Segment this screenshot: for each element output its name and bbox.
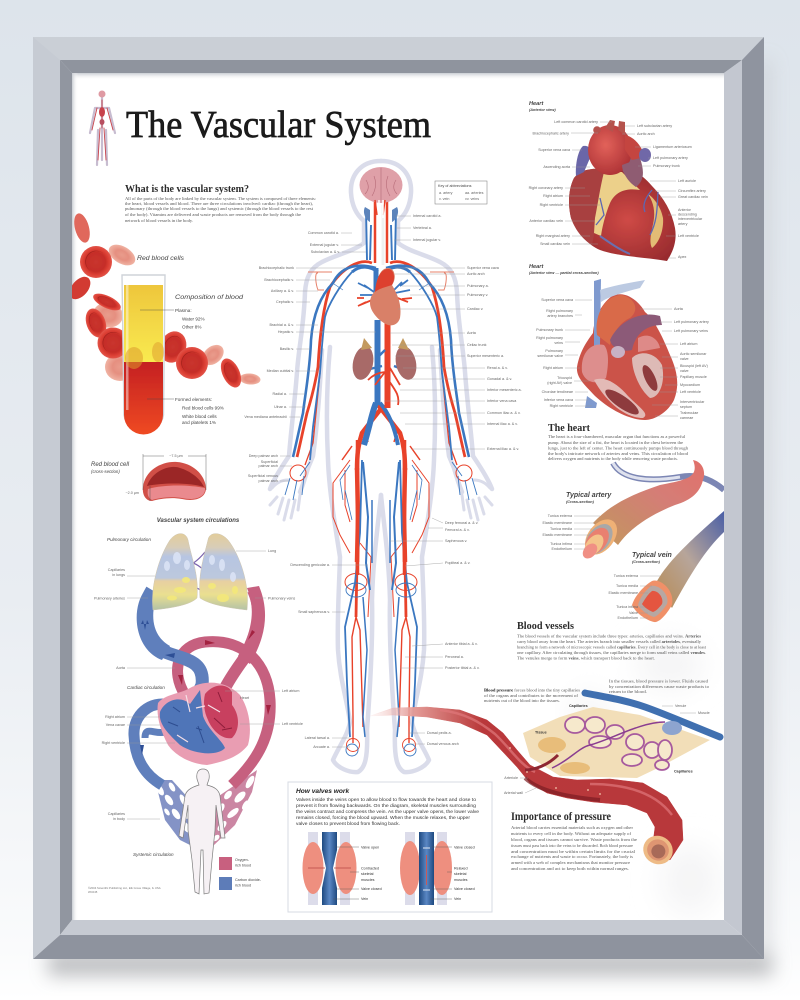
vessel labels: right: Aorta [467,331,477,335]
artery labels: Elastic membrane [542,521,572,525]
text block: blood vessels: The venules merge to form veins, which transport blood back to the heart. [517,656,655,662]
vessel labels: left: palmar arch [259,464,278,468]
heart: partial cross-section: Heart [529,264,544,270]
vessel labels: left: Subclavian a. & v. [311,250,340,254]
copyright: ©2004 Scientific Publishing Ltd., Elk Grove Village, IL USA [88,886,161,890]
vessel labels: right: Peroneal a. [445,655,464,659]
text block: blood pressure: of the organs and contributes to the movement of [484,693,579,698]
text block: importance of pressure: and concentration must be within certain limits for the crucial [511,849,636,854]
vessels [285,197,477,756]
text block: what is the vascular system: network of blood vessels in the body. [125,218,193,223]
circulation labels: Left ventricle [282,722,303,726]
vessel labels: right: Superior vena cava [467,266,500,270]
valve labels: muscles [361,878,375,882]
capillary bed labels [504,704,710,795]
vein tube [655,511,724,608]
heart section labels: semilunar valve [537,354,563,358]
heart section labels: septum [680,405,692,409]
text block: importance of pressure: blood, organs and tissues cannot survive. Waste products from the [511,837,637,843]
vessel labels: left: Vena mediana antebrachii [244,415,287,419]
heart section labels: Papillary muscle [680,375,707,379]
vessel labels: right [384,214,522,746]
valves text [296,797,479,826]
heart labels: Superior vena cava [538,148,571,152]
vessel labels: left: Axillary a. & v. [271,289,294,293]
text block: importance of pressure [511,809,637,871]
artery tube [593,460,704,545]
heart section labels: Chordae tendineae [542,390,573,394]
capillary bed labels: Capillaries [674,770,693,774]
valves text: prevent it from flowing backwards. On the diagram, skeletal muscles surrounding [296,803,476,808]
heart labels: Pulmonary trunk [653,164,680,168]
text block: blood pressure: nutrients out of the blood into the tissues. [484,698,560,703]
composition of blood labels [175,294,243,425]
composition of blood labels: Composition of blood [175,294,243,301]
artery cross-section [578,513,624,561]
heart: partial cross-section [529,264,709,420]
circulation labels: Pulmonary veins [268,596,295,600]
flow arrows: red [178,630,271,715]
circulation labels: Right ventricle [102,741,125,745]
vein labels: Endothelium [618,616,638,620]
key of abbreviations: vv. veins [465,197,479,201]
vessel labels: right: Pulmonary v. [467,293,488,297]
heart labels: artery [678,222,688,226]
circulation labels: Systemic circulation [133,852,174,857]
circulation labels: Cardiac circulation [127,685,165,690]
capillaries in body [154,770,257,846]
heart labels [529,120,708,259]
vessel labels: left: palmar arch [259,479,278,483]
vessel labels: right: Aortic arch [467,272,485,276]
vessel labels: left [244,231,376,749]
key of abbreviations: Key of abbreviations [438,184,472,188]
vessel labels: left: Basilic v. [280,347,294,351]
text block: what is the vascular system: All of the parts of the body are linked by the vascular system. The system is composed of three elements: [125,196,316,201]
circulation labels: Vena cavae [106,723,125,727]
vessel labels: left: Brachiocephalic v. [264,278,294,282]
composition of blood labels: White blood cells [182,414,217,419]
vessel labels: right: Renal a. & v. [487,366,508,370]
text block: importance of pressure: armed with a web of complex mechanisms that monitor pressure [511,860,630,865]
heart labels: Anterior [678,208,692,212]
heart section labels: Myocardium [680,383,700,387]
legend: blood type: rich blood [235,864,251,868]
artery labels: Endothelium [552,547,572,551]
typical artery [542,460,724,561]
vessel labels: right: Femoral a. & v. [445,528,470,532]
heart: partial cross-section: (Anterior view — partial cross-section) [529,271,599,275]
legend: blood type: rich blood [235,884,251,888]
circulation labels: Right atrium [105,715,125,719]
vessel labels: left: Cephalic v. [276,300,294,304]
vessels: oxygen-rich [178,586,270,785]
icon: small body figure [90,90,115,165]
tissue [523,707,710,778]
heart labels: Small cardiac vein [540,242,570,246]
circulation labels: Pulmonary arteries [94,596,125,600]
heart section labels: (right AV) valve [547,381,572,385]
test tube of blood [122,275,174,434]
circulation heading: Vascular system circulations [157,518,240,524]
text block: importance of pressure: Importance of pressure [511,809,612,823]
heart section labels: valve [680,369,689,373]
vein labels: Typical vein [632,552,672,559]
valve diagram: contracted [302,832,356,905]
heart labels: Anterior cardiac vein [529,219,563,223]
title: The Vascular System [126,104,431,146]
text block: blood vessels: branching to form a network of microscopic vessels called capillaries. Every cell in the body is close to at least [517,644,707,650]
artery labels: Tunica intima [550,542,573,546]
heart section labels: Left pulmonary artery [674,320,709,324]
valves text: valve closes to prevent blood from flowing back. [296,821,400,826]
text block: importance of pressure: exchange of nutrients and waste to occur. Fortunately, the body is [511,854,633,860]
vessel labels: right: Dorsal pedis a. [427,731,452,735]
panel: how valves work [288,782,492,912]
valves text: the veins contract and compress the vein. As the upper valve opens, the lower valve [296,809,479,814]
central heart [370,268,401,325]
legend: blood type: Carbon dioxide- [235,878,262,882]
text block: blood pressure [484,688,580,703]
vena cava and aorta [352,205,410,575]
copyright [88,886,161,894]
circulation labels: Aorta [116,666,126,670]
text block: blood vessels: The blood vessels of the vascular system include three types: arteries, capillaries and veins. Arteries [517,634,701,640]
vessel labels: right: Vertebral a. [413,226,432,230]
valve labels: Vein [361,897,368,901]
vessel labels: left: Small saphenous v. [298,610,330,614]
artery labels: Elastic membrane [542,533,572,537]
heart labels: interventricular [678,217,703,221]
text block: the heart: pump. About the size of a fist, the heart is located in the chest between the [548,440,683,446]
vessel labels: left: Arcuate a. [313,745,330,749]
red blood cells [66,212,261,391]
vein labels: Tunica externa [614,574,639,578]
valve labels: Valve closed [454,887,475,891]
red blood cell cross-section: ~2.0 µm [125,491,139,495]
text block: what is the vascular system: pulmonary (through the blood vessels to the lungs) and systemic (through the blood vessels to the rest [125,206,314,211]
heart labels: Circumflex artery [678,189,706,193]
background vein curve [613,463,724,490]
red blood cell cross-section [91,454,206,501]
heart section labels: Right pulmonary [546,309,573,313]
typical vein [608,511,724,622]
legend: blood type [219,857,262,890]
heart labels: Right marginal artery [536,234,570,238]
lungs [152,534,248,610]
valve labels: Valve closed [454,846,475,850]
kidneys [350,338,419,382]
capillary bed labels: Venule [675,704,686,708]
vessel labels: left: Brachiocephalic trunk [259,266,294,270]
vein labels: (Cross-section) [632,560,661,564]
heart section labels: valve [680,357,689,361]
heart labels: Left subclavian artery [637,124,672,128]
composition of blood labels: Plasma: [175,308,192,313]
vein cross-section [632,581,672,622]
heart labels: descending [678,212,697,216]
circulation labels: Left atrium [282,689,299,693]
text block: what is the vascular system: What is the vascular system? [125,184,249,195]
brain [360,167,402,218]
heart labels: Ligamentum arteriosum [653,145,692,149]
heart labels: Left pulmonary artery [653,156,688,160]
valve labels: Vein [454,897,461,901]
human silhouette [179,769,225,894]
vessel labels: right: Inferior vena cava [487,399,517,403]
heart section labels: Inferior vena cava [544,398,574,402]
heart section labels: artery branches [547,314,573,318]
vessel labels: left: Hepatic v. [278,330,294,334]
heart illustration [569,120,676,261]
heart section labels [536,298,709,420]
vessel labels: right: Pulmonary a. [467,284,489,288]
text block: importance of pressure: tissues must pass back into the veins to be discarded. Both blood pressure [511,843,633,848]
text block: the heart: The heart is a four-chambered, muscular organ that functions as a powerful [548,434,686,440]
vessel labels: right: Anterior tibial a. & v. [445,642,478,646]
circulation labels: Capillaries [108,812,125,816]
body outline [270,161,492,772]
heart labels: Aortic arch [637,132,655,136]
heart section labels: Right pulmonary [536,336,563,340]
heart section labels: carneae [680,416,693,420]
text block: blood vessels: carry blood away from the heart. The arteries branch into smaller vessels called arterioles, eventually [517,639,702,645]
poster sheet [72,73,724,920]
vessel labels: right: Common iliac a. & v. [487,411,521,415]
vein labels: Tunica intima [616,605,639,609]
vessel labels: left: Brachial a. & v. [269,323,294,327]
vessel labels: right: External iliac a. & v. [487,447,519,451]
text block: tissue exchange: In the tissues, blood pressure is lower. Fluids caused [609,678,709,684]
heart section labels: Superior vena cava [541,298,574,302]
text block: blood vessels: one capillary. After circulating through tissues, the capillaries merge to form small veins called venules. [517,650,706,656]
capillary network [565,717,672,770]
key of abbreviations: v. vein [439,197,449,201]
valve labels: skeletal [454,872,467,876]
text block: what is the vascular system: of the body). Vitamins are delivered and waste products are removed from the body through the [125,212,301,217]
valve diagram: relaxed [400,832,452,905]
valve labels: Contracted [361,866,379,870]
vessel labels: left: Deep palmar arch [249,454,278,458]
text block: importance of pressure: Arterial blood carries essential materials such as oxygen and other [511,825,634,830]
heart section labels: Left ventricle [680,390,701,394]
heart labels: Left common carotid artery [554,120,598,124]
heart section labels: Interventricular [680,400,705,404]
copyright: WC045 [88,890,98,894]
valves text: remains closed, forcing the blood upward. When the muscle relaxes, the upper [296,815,470,820]
vein labels: Valve [629,611,638,615]
circulation labels: Heart [240,696,249,700]
circulation labels: in body [113,817,125,821]
red blood cell cross-section: (cross-section) [91,469,120,474]
heart labels: Ascending aorta [543,165,571,169]
main figure: vascular body [270,161,492,772]
heart labels: Apex [678,255,687,259]
vessel labels: left: Common carotid a. [308,231,339,235]
valve labels: Valve open [361,846,379,850]
heart labels: Brachiocephalic artery [533,132,569,136]
composition of blood labels: Formed elements: [175,397,212,402]
heart section labels: Right ventricle [550,404,573,408]
capillary bed labels: Arterial wall [504,791,523,795]
heart labels: Right ventricle [540,203,563,207]
vessel labels: right: Gonadal a. & v. [487,377,512,381]
valves heading: How valves work [296,788,349,795]
text block: blood pressure: Blood pressure forces blood into the tiny capillaries [484,688,580,692]
legend: blood type: Oxygen- [235,858,250,862]
flow arrows [140,620,175,755]
heart section labels: Left pulmonary veins [674,329,708,333]
circulation diagram [94,518,303,894]
heart labels: Left ventricle [678,234,699,238]
vessel labels: left: Superficial venous [248,474,278,478]
poster content [66,73,724,920]
heart labels: Right coronary artery [529,186,563,190]
vessel labels: right: Saphenous v. [445,539,467,543]
artery labels: (Cross-section) [566,500,595,504]
vessel labels: left: Descending genicular a. [290,563,330,567]
large artery vessel [370,707,683,870]
artery labels: Typical artery [566,492,612,499]
vessel labels: right: Deep femoral a. & v. [445,521,478,525]
text block: what is the vascular system: the heart, blood vessels and blood. There are three circulations involved: cardiac (through the heart), [125,201,313,207]
vessel labels: right: Popliteal a. & v. [445,561,470,565]
lung vessels [357,280,412,306]
vessel labels: right: Internal iliac a. & v. [487,422,518,426]
vessel labels: left: Median cubital v. [267,369,294,373]
valve labels: Valve closed [361,887,382,891]
vessel labels: right: Celiac trunk [467,343,487,347]
capillary bed labels: Tissue [535,730,547,734]
vessel labels: right: Dorsal venous arch [427,742,459,746]
vessel labels: right: Posterior tibial a. & v. [445,666,480,670]
vein labels [608,552,672,620]
heart: anterior view: Heart [529,101,544,107]
text block: importance of pressure: and concentration and act to keep both within normal ranges. [511,866,629,871]
circulation labels [94,537,303,857]
composition of blood labels: Water 92% [182,316,205,322]
heart labels: Right atrium [543,194,563,198]
heart labels: Left auricle [678,179,696,183]
text block: the heart: lungs, just to the left of center. The heart continuously pumps blood through [548,446,689,452]
capillary bed illustration [523,693,720,778]
heart section labels: Left atrium [680,342,697,346]
artery labels: Tunica externa [548,514,573,518]
venule [585,693,720,737]
text block: blood vessels: Blood vessels [517,620,575,632]
vessel labels: right: Internal jugular v. [413,238,441,242]
text block: tissue exchange [609,678,710,694]
capillary bed labels: Arteriole [504,776,518,780]
circulation labels: Lung [268,549,276,553]
heart section labels: Right atrium [543,366,563,370]
heart labels: Great cardiac vein [678,195,708,199]
vessel labels: left: External jugular v. [310,243,339,247]
heart section labels: Pulmonary trunk [536,328,563,332]
vein labels: Elastic membrane [608,591,638,595]
vessel labels: left: Radial a. [272,392,287,396]
text block: the heart: The heart [548,423,590,434]
text block: the heart: delivers oxygen and nutrients to the body while removing waste products. [548,456,678,461]
valve labels: Relaxed [454,866,468,870]
text block: blood vessels [517,620,707,662]
artery labels: Tunica media [550,527,573,531]
vessel labels: right: Superior mesenteric a. [467,354,504,358]
vein labels: Tunica media [616,584,639,588]
composition of blood labels: Red blood cells 99% [182,406,224,410]
text block: importance of pressure: nutrients to every cell in the body. Without an adequate supply of [511,831,632,836]
valve labels: skeletal [361,872,374,876]
heart section labels: Aorta [674,307,684,311]
heart: anterior view: (Anterior view) [529,108,556,112]
vessel labels: right: Internal carotid a. [413,214,442,218]
capillary bed labels: Muscle [698,711,710,715]
text block: what is the vascular system [125,184,316,223]
text block: the heart [548,423,689,461]
vessel labels: left: Superficial [261,460,278,464]
composition of blood labels: and platelets 1% [182,420,216,425]
red blood cell cross-section: ~7.5 µm [169,454,183,458]
circulation labels: in lungs [112,573,125,577]
heart section labels: Aortic semilunar [680,352,707,356]
text block: the heart: the body's intricate network of arteries and veins. This circulation of blood [548,451,689,456]
valve labels [333,846,475,901]
heart section labels: veins [554,341,563,345]
heart: anterior view [529,101,708,261]
vessel labels: right: Cardiac v. [467,307,483,311]
vessel labels: right: Inferior mesenteric a. [487,388,522,392]
valve labels: muscles [454,878,468,882]
heart section illustration [577,279,677,420]
key of abbreviations: a. artery [439,191,453,195]
artery labels [542,492,612,551]
capillary bed labels: Capillaries [569,704,588,708]
vessel labels: left: Ulnar a. [274,405,287,409]
text block: tissue exchange: return to the blood. [609,689,647,694]
composition of blood labels: Other 8% [182,324,201,330]
key of abbreviations [435,181,487,204]
valves text: Valves inside the veins open to allow blood to flow towards the heart and close to [296,797,476,802]
heart section labels: Trabeculae [680,411,698,415]
heart section labels: Pulmonary [545,349,563,353]
key of abbreviations: aa. arteries [465,191,484,195]
circulation labels: Capillaries [108,568,125,572]
circulation labels: Pulmonary circulation [107,537,151,542]
text block: tissue exchange: by concentration differences cause waste products to [609,684,710,689]
vessels: carbon-dioxide-rich [134,590,202,785]
heart chambers [157,683,250,765]
heart section labels: Bicuspid (left AV) [680,364,708,368]
red blood cells: Red blood cells [137,255,185,262]
heart section labels: Tricuspid [557,376,572,380]
vessel labels: left: Lateral tarsal a. [305,736,330,740]
red blood cell cross-section: Red blood cell [91,462,130,468]
